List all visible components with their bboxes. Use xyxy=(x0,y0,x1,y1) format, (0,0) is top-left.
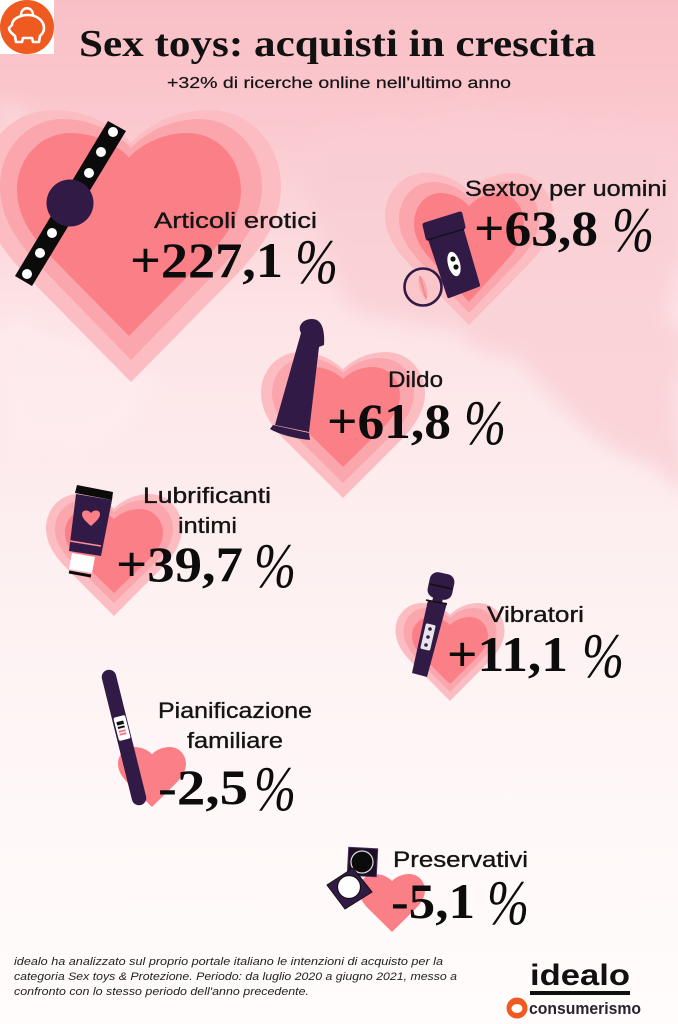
footnote: confronto con lo stesso periodo dell'anno precedente. xyxy=(14,986,309,998)
logo: piggy bank badge xyxy=(0,0,54,54)
panel: preservativi xyxy=(327,847,529,938)
logo: idealo: idealo xyxy=(530,959,630,992)
heart: sextoy xyxy=(385,173,553,325)
value: -2,5 %: % xyxy=(254,753,296,824)
value: -5,1 %: -5,1 xyxy=(391,873,475,929)
value: +11,1 %: % xyxy=(582,620,624,691)
label: sextoy per uomini: Sextoy per uomini xyxy=(465,176,667,201)
label: lubrificanti intimi xyxy=(143,483,271,538)
heart: articoli erotici xyxy=(0,110,281,382)
label: pianificazione familiare xyxy=(158,698,312,753)
value: -2,5 %: -2,5 xyxy=(158,759,248,815)
icon: lubricant tube xyxy=(69,485,113,576)
value: +11,1 %: +11,1 xyxy=(447,626,568,682)
heart: vibratori xyxy=(396,603,504,701)
title: Sex toys: acquisti in crescita xyxy=(79,23,596,65)
value: +61,8 %: % xyxy=(464,387,506,458)
value: +227,1 %: +227,1 xyxy=(130,232,283,288)
heart: lubrificanti xyxy=(46,494,182,616)
footnote xyxy=(14,956,457,998)
icon: masturbator xyxy=(404,214,478,306)
icon: dildo xyxy=(270,319,324,440)
label: lubrificanti intimi: intimi xyxy=(178,513,237,538)
icon: condoms xyxy=(327,847,378,909)
label: articoli erotici: Articoli erotici xyxy=(154,208,317,233)
panel: articoli erotici xyxy=(0,110,338,382)
heart: preservativi xyxy=(359,874,425,932)
label: dildo: Dildo xyxy=(388,367,443,392)
value: -5,1 %: % xyxy=(487,867,529,938)
value: +63,8 %: % xyxy=(612,194,654,265)
heart: dildo xyxy=(261,352,425,498)
icon: wand vibrator xyxy=(412,571,456,677)
label: pianificazione familiare: familiare xyxy=(187,728,283,753)
panel: vibratori xyxy=(396,571,624,701)
panel: lubrificanti intimi xyxy=(46,483,296,616)
label: pianificazione familiare: Pianificazione xyxy=(158,698,312,723)
footnote: idealo ha analizzato sul proprio portale italiano le intenzioni di acquisto per la xyxy=(14,956,443,968)
icon: pregnancy test xyxy=(109,677,139,798)
value: +227,1 %: % xyxy=(295,226,338,297)
icon: ball gag xyxy=(15,121,126,286)
panel: pianificazione familiare xyxy=(109,677,312,824)
value: +61,8 %: +61,8 xyxy=(327,393,451,449)
logo: consumerismo: consumerismo xyxy=(529,999,641,1018)
label: lubrificanti intimi: Lubrificanti xyxy=(143,483,271,508)
panel: dildo xyxy=(261,319,506,498)
label: vibratori: Vibratori xyxy=(487,602,584,627)
label: preservativi: Preservativi xyxy=(393,847,528,872)
value: +63,8 %: +63,8 xyxy=(474,200,598,256)
panel: sextoy per uomini xyxy=(385,173,667,325)
footnote: categoria Sex toys & Protezione. Periodo: da luglio 2020 a giugno 2021, messo a xyxy=(14,971,457,983)
value: +39,7 %: +39,7 xyxy=(116,536,243,592)
heart: pianificazione xyxy=(118,747,186,807)
value: +39,7 %: % xyxy=(254,530,296,601)
subtitle: +32% di ricerche online nell'ultimo anno xyxy=(167,75,511,92)
